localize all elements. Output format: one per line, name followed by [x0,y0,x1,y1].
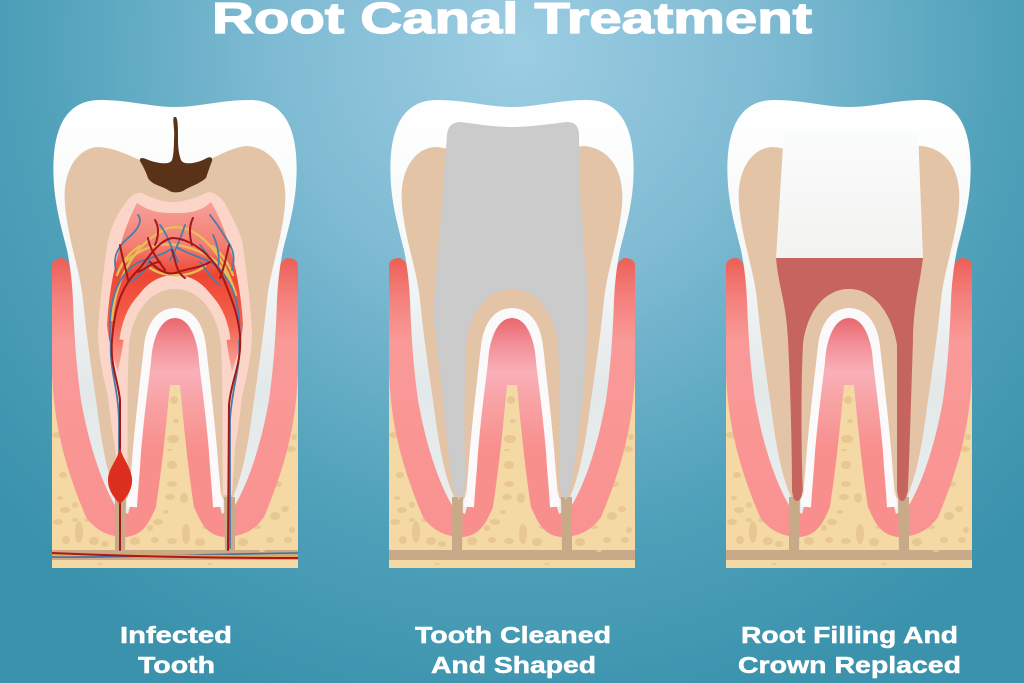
tooth enamel and dentin [727,100,971,552]
cleaned grey canal [433,122,588,500]
label: tooth cleaned and shaped [415,622,611,678]
jaw bone and gum [726,258,972,568]
jaw bone and gum [52,258,298,568]
root filling [776,258,923,501]
bottom vessels [52,553,298,558]
tooth enamel and dentin [53,100,297,552]
panel: filled and restored tooth [726,100,972,568]
crown restoration [776,130,923,258]
panel: cleaned and shaped tooth [389,100,635,568]
abscess at root tip [108,447,132,504]
panel: infected tooth [52,100,298,568]
label: root filling and crown replaced [738,622,961,678]
label: infected tooth: Infected [120,622,232,648]
label: root filling and crown replaced: Root Filling And [741,622,958,648]
tooth enamel and dentin [390,100,634,552]
label: tooth cleaned and shaped: Tooth Cleaned [415,622,611,648]
inner dentin arch [464,289,560,497]
label: infected tooth [120,622,232,678]
cavity decay [140,117,212,192]
pulp chamber [98,192,252,497]
nerves and blood vessels [110,215,240,550]
label: root filling and crown replaced: Crown Replaced [738,652,961,678]
label: infected tooth: Tooth [138,652,215,678]
inner dentin arch [802,289,896,497]
jaw bone and gum [389,258,635,568]
label: tooth cleaned and shaped: And Shaped [431,652,596,678]
